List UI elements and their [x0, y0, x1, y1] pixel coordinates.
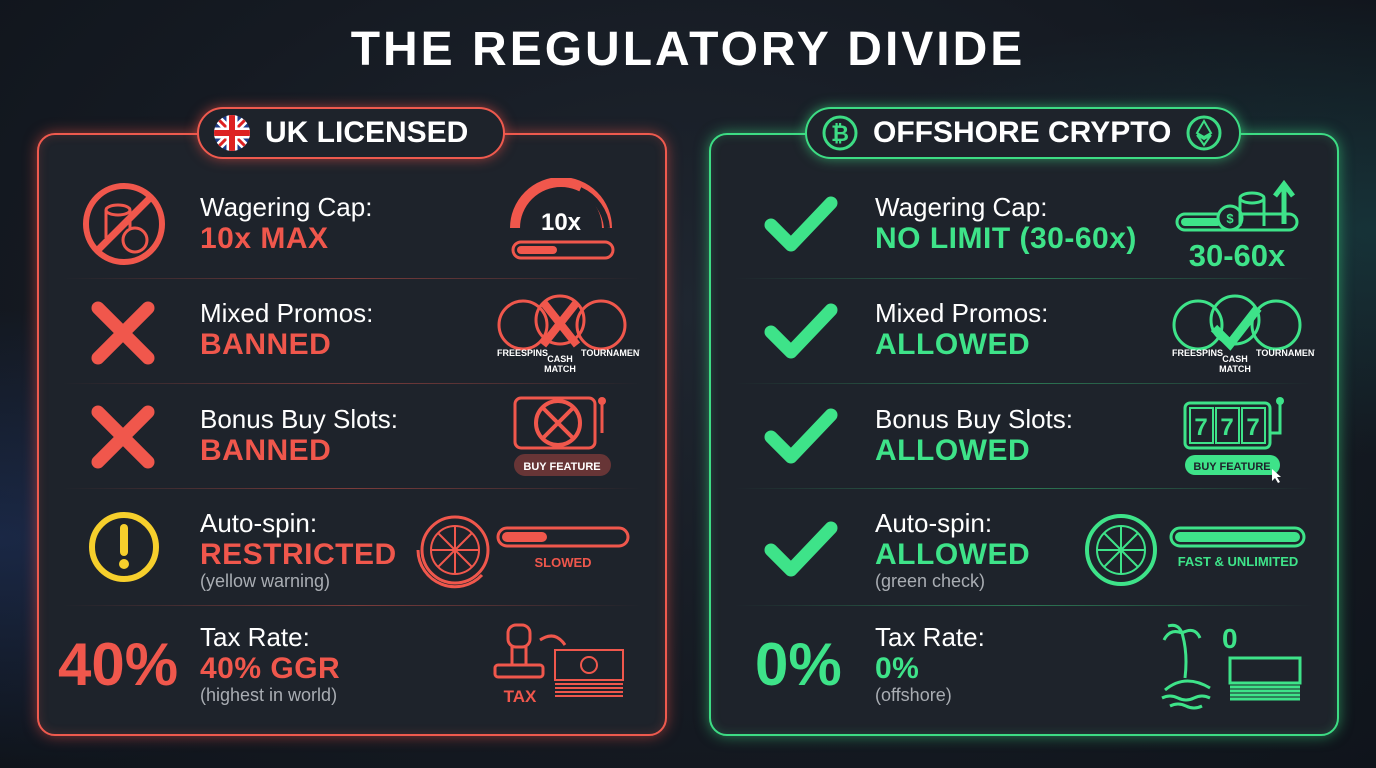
dividers [62, 278, 642, 279]
text: auto-spin offshore: ALLOWED [875, 538, 1030, 571]
icon: wheel fast [1085, 514, 1306, 586]
heading: UK licensed: UK LICENSED [265, 116, 468, 149]
heading: offshore crypto: OFFSHORE CRYPTO [873, 116, 1171, 149]
icon: 777 slot [1184, 397, 1284, 483]
text: tax UK [200, 622, 340, 705]
text: auto-spin UK: Auto-spin: [200, 508, 317, 538]
text: tax offshore: Tax Rate: [875, 622, 985, 652]
text: wagering cap UK: 10x MAX [200, 222, 329, 255]
icon: promos crossed: CASH [547, 354, 573, 364]
text: auto-spin UK: (yellow warning) [200, 571, 330, 591]
icon: tax stamp and money: TAX [504, 687, 537, 706]
text: tax offshore [875, 622, 985, 705]
icon: green check [764, 304, 838, 358]
text: tax offshore: (offshore) [875, 685, 952, 705]
icon: coins bar 30-60x: $ [1226, 211, 1234, 226]
icon: green check [764, 408, 838, 464]
icon: promos crossed [497, 294, 640, 374]
text: auto-spin offshore: (green check) [875, 571, 985, 591]
icon: bitcoin: ₿ [831, 121, 849, 146]
icon: wheel slowed: SLOWED [534, 555, 592, 570]
text: auto-spin UK: RESTRICTED [200, 538, 397, 571]
panel: UK licensed [37, 133, 667, 736]
text: wagering cap offshore: NO LIMIT (30-60x) [875, 222, 1137, 255]
text: bonus buy UK [200, 404, 398, 467]
icon: promos checked: MATCH [1219, 364, 1251, 374]
text: auto-spin UK [200, 508, 397, 591]
icon: slot banned: BUY FEATURE [523, 461, 601, 473]
text: mixed promos offshore [875, 298, 1048, 361]
text: tax UK: 40% GGR [200, 652, 340, 685]
icon: ethereum [1186, 116, 1222, 150]
text: wagering cap UK: Wagering Cap: [200, 192, 372, 222]
text: mixed promos UK: BANNED [200, 328, 331, 361]
icon: island and money [1161, 623, 1302, 710]
text: mixed promos UK: Mixed Promos: [200, 298, 373, 328]
panel: offshore crypto [709, 133, 1339, 736]
icon: promos crossed: MATCH [544, 364, 576, 374]
icon: slot banned [514, 396, 611, 476]
icon: red X [92, 302, 154, 364]
text: bonus buy UK: BANNED [200, 434, 331, 467]
text: mixed promos offshore: Mixed Promos: [875, 298, 1048, 328]
icon: green check [764, 522, 838, 576]
heading: UK licensed [197, 107, 505, 159]
stat: 0%: 0% [755, 631, 842, 698]
icon: yellow warning [89, 512, 159, 582]
text: bonus buy offshore [875, 404, 1073, 467]
icon: 777 slot: 7 [1246, 414, 1260, 441]
icon: wheel slowed [416, 516, 630, 588]
icon: 777 slot: 7 [1194, 414, 1208, 441]
icon: wheel fast: FAST & UNLIMITED [1178, 554, 1298, 569]
icon: island and money: 0 [1222, 623, 1238, 654]
icon: promos checked [1172, 294, 1315, 374]
text: mixed promos offshore: ALLOWED [875, 328, 1030, 361]
icon: 10x gauge: 10x [541, 209, 582, 236]
icon: tax stamp and money [494, 624, 624, 706]
text: wagering cap UK [200, 192, 372, 255]
icon: green check [764, 196, 838, 252]
icon: 777 slot: BUY FEATURE [1193, 461, 1271, 473]
text: bonus buy offshore: Bonus Buy Slots: [875, 404, 1073, 434]
icon: 777 slot: 7 [1220, 414, 1234, 441]
heading: offshore crypto [805, 107, 1241, 159]
text: tax UK: (highest in world) [200, 685, 337, 705]
text: auto-spin offshore: Auto-spin: [875, 508, 992, 538]
text: mixed promos UK [200, 298, 373, 361]
icon: coins bar 30-60x [1176, 180, 1298, 271]
text: bonus buy UK: Bonus Buy Slots: [200, 404, 398, 434]
text: bonus buy offshore: ALLOWED [875, 434, 1030, 467]
icon: UK flag [214, 115, 250, 151]
text: wagering cap offshore [875, 192, 1137, 255]
icon: bitcoin [822, 116, 858, 150]
icon: promos crossed: FREESPINS [497, 348, 548, 358]
icon: no-coins symbol [83, 183, 165, 265]
icon: promos checked: CASH [1222, 354, 1248, 364]
icon: 10x gauge [510, 178, 614, 260]
stat: 40%: 40% [58, 631, 178, 698]
icon: red X [92, 406, 154, 468]
text: auto-spin offshore [875, 508, 1030, 591]
text: tax UK: Tax Rate: [200, 622, 310, 652]
title: THE REGULATORY DIVIDE [351, 23, 1025, 76]
text: wagering cap offshore: Wagering Cap: [875, 192, 1047, 222]
icon: promos checked: FREESPINS [1172, 348, 1223, 358]
text: tax offshore: 0% [875, 652, 919, 685]
